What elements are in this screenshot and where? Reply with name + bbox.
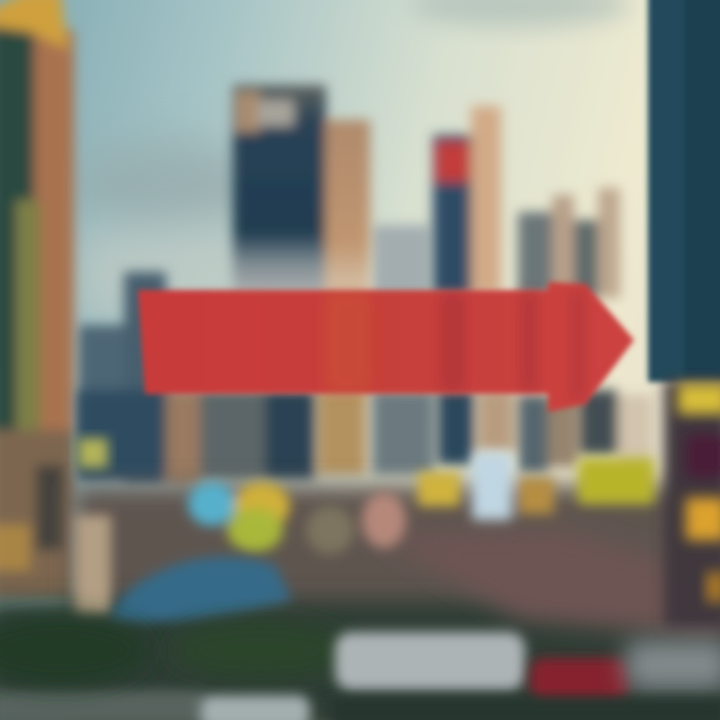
distant skyline buildings — [78, 188, 620, 482]
ground and street area — [0, 438, 720, 720]
blue dome roof — [110, 556, 292, 622]
lower buildings below the arrow — [78, 390, 652, 485]
red arrow pointing right — [138, 282, 634, 412]
right-centre tower with red mark — [433, 106, 501, 295]
left foreground tower — [0, 0, 75, 600]
colourful signs and billboards — [188, 452, 654, 554]
central tower — [233, 85, 370, 295]
right foreground tower — [648, 0, 720, 630]
trees and foreground vehicles — [0, 614, 720, 720]
